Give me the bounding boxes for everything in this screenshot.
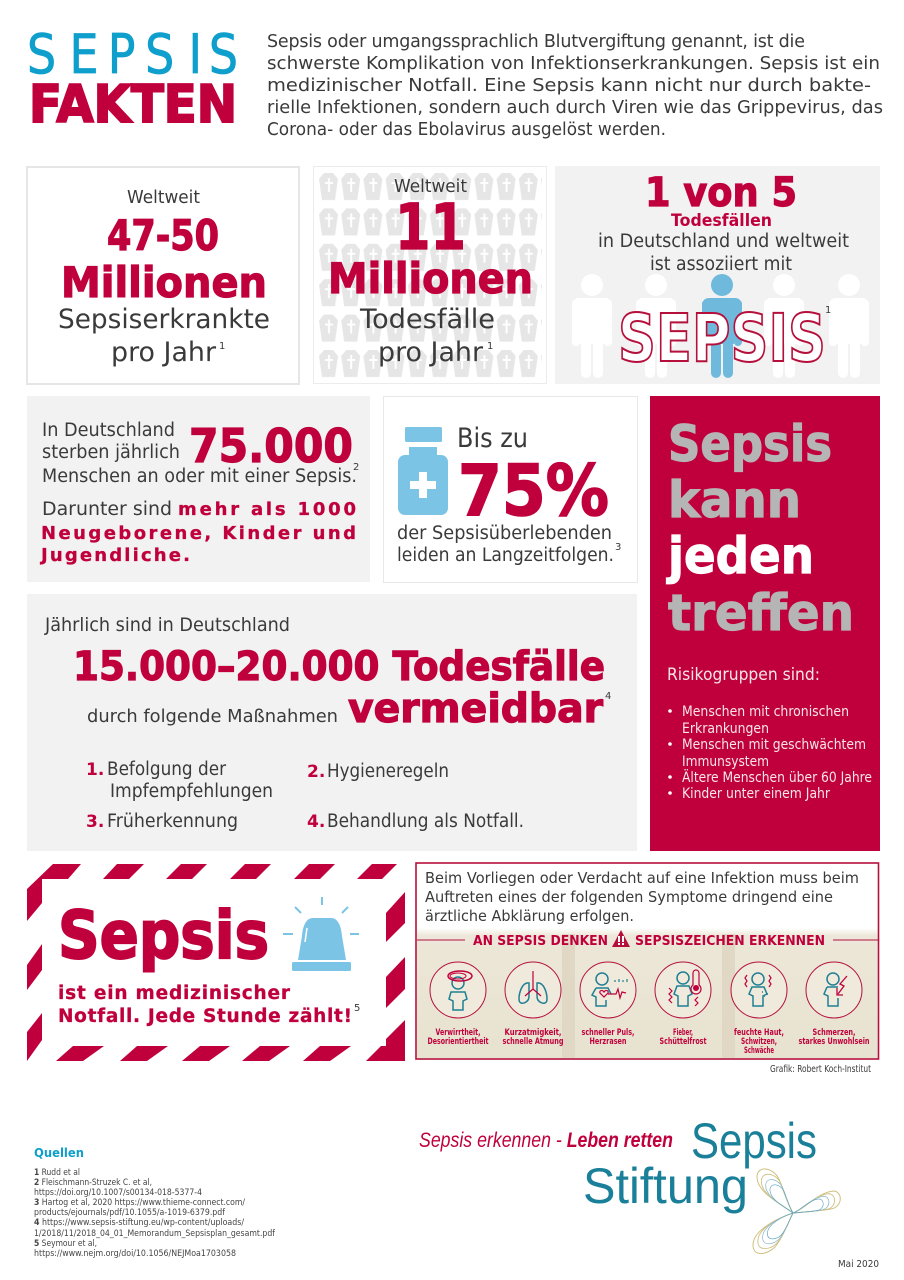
measures list: Früherkennung — [107, 811, 238, 832]
panel: 47-50 Millionen: pro Jahr — [111, 337, 217, 368]
panel: 75.000: Jugendliche. — [39, 545, 190, 566]
measures list: Impfempfehlungen — [110, 781, 273, 802]
sources: 2 Fleischmann-Struzek C. et al, — [34, 1177, 152, 1187]
symptom: feuchte Haut: Schwitzen, — [741, 1037, 777, 1047]
panel: Sepsis kann jeden treffen: kann — [668, 471, 801, 529]
symptom: Kurzatmigkeit: schnelle Atmung — [502, 1037, 564, 1047]
symptom: feuchte Haut — [731, 962, 787, 1056]
panel: 47-50 Millionen: 1 — [219, 341, 225, 352]
title — [27, 22, 238, 135]
panel: 1 von 5 — [555, 166, 880, 384]
panel: 11 Millionen: 1 — [487, 341, 493, 352]
panel: 75.000: sterben jährlich — [42, 442, 180, 463]
panel: 11 Millionen: pro Jahr — [378, 337, 484, 368]
panel: 11 Millionen — [314, 166, 546, 384]
sources: https://doi.org/10.1007/s00134-018-5377-4 — [34, 1187, 202, 1197]
intro text block: Sepsis oder umgangssprachlich Blutvergiftung genannt, ist die — [267, 32, 805, 52]
measures list: 2. — [307, 762, 325, 782]
panel: 75%: leiden an Langzeitfolgen. — [397, 545, 614, 566]
sources: products/ejournals/pdf/10.1055/a-1019-6379.pdf — [34, 1207, 226, 1217]
sources: 5 Seymour et al, — [34, 1238, 97, 1248]
panel: 47-50 Millionen: Millionen — [61, 258, 267, 307]
icon: knot — [753, 1169, 840, 1254]
symptom: schneller Puls: schneller Puls, — [582, 1028, 634, 1038]
panel: Symptome: ärztliche Abklärung erfolgen. — [425, 907, 634, 925]
panel: vermeidbare Todesfälle: Jährlich sind in Deutschland — [44, 614, 290, 636]
symptom: Verwirrtheit: Verwirrtheit, — [436, 1028, 480, 1038]
panel: vermeidbare Todesfälle: 15.000–20.000 Todesfälle — [73, 644, 605, 690]
logo: Sepsis Stiftung: Sepsis — [691, 1113, 817, 1169]
icon: warning triangle — [612, 930, 630, 947]
measures list: Befolgung der — [107, 759, 226, 780]
panel: 47-50 Millionen: Sepsiserkrankte — [58, 304, 270, 335]
panel: medizinischer Notfall: Sepsis — [58, 897, 269, 974]
panel: 1 von 5: in Deutschland und weltweit — [598, 231, 849, 252]
sources: 4 https://www.sepsis-stiftung.eu/wp-content/uploads/ — [34, 1217, 244, 1227]
panel: 75%: der Sepsisüberlebenden — [397, 523, 612, 544]
panel: 1 von 5: Todesfällen — [671, 211, 772, 231]
panel: 1 von 5: ist assoziiert mit — [650, 254, 792, 275]
symptom: schneller Puls: Herzrasen — [590, 1037, 626, 1047]
symptom: Schmerzen: Schmerzen, — [812, 1028, 856, 1038]
icon: siren — [283, 897, 359, 971]
symptom: Verwirrtheit — [428, 962, 489, 1047]
measures list: Behandlung als Notfall. — [327, 811, 524, 832]
panel: 75.000: In Deutschland — [42, 420, 175, 441]
panel: 75.000: Darunter sind — [42, 499, 172, 520]
measures list: Hygieneregeln — [327, 761, 449, 782]
panel: 1 von 5: SEPSIS — [618, 300, 826, 377]
panel: medizinischer Notfall — [27, 864, 405, 1061]
symptom: Fieber: Fieber, — [673, 1028, 693, 1038]
panel: 47-50 Millionen: 47-50 — [107, 211, 219, 260]
measures list: 1. — [86, 760, 104, 780]
panel: Symptome: Beim Vorliegen oder Verdacht auf eine Infektion muss beim — [425, 869, 859, 887]
panel: 75.000: mehr als 1000 — [178, 499, 356, 520]
sources: 3 Hartog et al, 2020 https://www.thieme-connect.com/ — [34, 1197, 245, 1207]
panel: 75.000: Menschen an oder mit einer Sepsis. — [42, 466, 357, 487]
panel: 75%: 3 — [615, 542, 621, 553]
beige graphic — [417, 928, 878, 1058]
symptom: Kurzatmigkeit — [502, 962, 564, 1047]
panel: Symptome: Auftreten eines der folgenden Symptome dringend eine — [425, 888, 833, 906]
panel: 47-50 Millionen — [27, 167, 299, 384]
panel: 11 Millionen: Todesfälle — [359, 304, 495, 335]
measures list: 4. — [307, 812, 325, 832]
sources: 1/2018/11/2018_04_01_Memorandum_Sepsisplan_gesamt.pdf — [34, 1228, 276, 1238]
panel: 75.000 — [27, 396, 370, 582]
symptom: Kurzatmigkeit: Kurzatmigkeit, — [504, 1028, 562, 1038]
panel: 11 Millionen: Weltweit — [394, 176, 467, 197]
panel: 75%: Bis zu — [457, 423, 528, 454]
panel: vermeidbare Todesfälle — [27, 594, 637, 851]
risk groups list: Ältere Menschen über 60 Jahre — [682, 768, 872, 786]
panel: Symptome — [416, 863, 878, 1059]
panel: medizinischer Notfall: ist ein medizinischer — [58, 983, 291, 1004]
symptom: Fieber: Schüttelfrost — [660, 1037, 707, 1047]
icon: people — [572, 274, 869, 378]
panel: 11 Millionen: 11 — [395, 191, 466, 264]
sources: https://www.nejm.org/doi/10.1056/NEJMoa1703058 — [34, 1248, 236, 1258]
panel: vermeidbare Todesfälle: vermeidbar — [348, 686, 603, 732]
measures list — [86, 759, 524, 832]
symptom: Schmerzen: starkes Unwohlsein — [798, 1037, 870, 1047]
symptom: feuchte Haut: feuchte Haut, — [734, 1028, 784, 1038]
credit: Grafik: Robert Koch-Institut — [770, 1064, 871, 1075]
panel: 75.000: 75.000 — [189, 419, 353, 473]
panel: Sepsis kann jeden treffen: jeden — [666, 527, 814, 585]
sources: Quellen — [34, 1145, 84, 1160]
risk groups list — [667, 665, 872, 802]
risk groups list: Immunsystem — [682, 754, 769, 770]
intro text block — [267, 32, 883, 140]
panel: medizinischer Notfall: Notfall. Jede Stunde zählt! — [58, 1006, 352, 1027]
icon: medicine bottle — [398, 427, 448, 515]
panel: 47-50 Millionen: Weltweit — [127, 187, 200, 208]
symptom: Schmerzen — [798, 962, 870, 1047]
panel: 75.000: 2 — [353, 462, 359, 473]
panel: 1 von 5: 1 — [825, 305, 831, 316]
intro text block: rielle Infektionen, sondern auch durch Viren wie das Grippevirus, das — [267, 98, 883, 118]
symptom: Fieber — [655, 962, 711, 1047]
panel: Sepsis kann jeden treffen: treffen — [668, 584, 854, 642]
intro text block: Corona- oder das Ebolavirus ausgelöst werden. — [267, 120, 666, 140]
panel: 75% — [384, 396, 638, 582]
measures list: 3. — [86, 812, 104, 832]
symptom: Verwirrtheit: Desorientiertheit — [428, 1037, 489, 1047]
symptom: schneller Puls — [580, 962, 636, 1047]
title: SEPSIS — [27, 22, 238, 86]
risk groups list: Erkrankungen — [682, 721, 769, 737]
risk groups list: Menschen mit geschwächtem — [682, 737, 866, 753]
sources — [34, 1145, 276, 1258]
panel: vermeidbare Todesfälle: 4 — [605, 691, 611, 702]
intro text block: medizinischer Notfall. Eine Sepsis kann nicht nur durch bakte- — [267, 76, 871, 96]
title: FAKTEN — [29, 75, 237, 135]
hazard stripes border — [27, 864, 405, 1061]
panel: 75.000: Neugeborene, Kinder und — [41, 523, 356, 544]
panel: Sepsis kann jeden treffen — [650, 396, 880, 851]
logo: Sepsis Stiftung — [583, 1113, 840, 1254]
beige graphic: AN SEPSIS DENKEN — [473, 933, 608, 949]
symptom: feuchte Haut: Schwäche — [744, 1046, 774, 1056]
logo: Sepsis Stiftung: Stiftung — [583, 1158, 748, 1214]
risk groups list: Risikogruppen sind: — [667, 665, 820, 684]
risk groups list: Kinder unter einem Jahr — [682, 786, 830, 802]
panel: 11 Millionen: Millionen — [328, 254, 533, 303]
sources: 1 Rudd et al — [34, 1167, 80, 1177]
panel: 1 von 5: 1 von 5 — [645, 170, 797, 216]
date: Mai 2020 — [838, 1259, 879, 1270]
beige graphic: SEPSISZEICHEN ERKENNEN — [635, 933, 825, 949]
panel: vermeidbare Todesfälle: durch folgende Maßnahmen — [87, 706, 338, 727]
risk groups list: Menschen mit chronischen — [682, 704, 849, 720]
panel: medizinischer Notfall: 5 — [354, 1003, 360, 1014]
intro text block: schwerste Komplikation von Infektionserkrankungen. Sepsis ist ein — [267, 54, 880, 74]
slogan: Sepsis erkennen - Leben retten — [419, 1129, 673, 1152]
panel: Sepsis kann jeden treffen: Sepsis — [668, 415, 832, 473]
panel: 75%: 75% — [458, 450, 609, 532]
